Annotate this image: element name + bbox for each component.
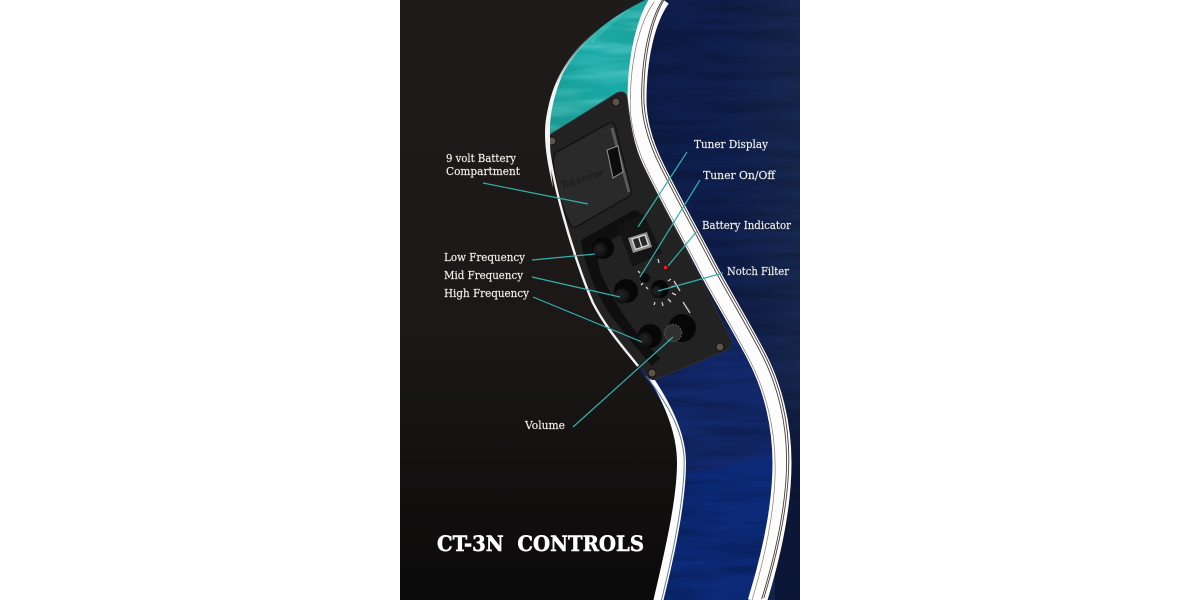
infographic: CT-3N controls: [400, 0, 800, 600]
label: high frequency: High Frequency: [444, 287, 530, 300]
label: 9 volt battery compartment: [446, 152, 521, 178]
preamp recess: [581, 210, 660, 366]
battery LED: [662, 264, 668, 270]
plate screws: [548, 98, 724, 377]
label: notch filter: Notch Filter: [727, 265, 790, 278]
battery latch: [607, 146, 623, 178]
title: CT-3N CONTROLS: [437, 531, 644, 556]
low frequency knob: [592, 237, 614, 259]
label: low frequency: Low Frequency: [444, 251, 526, 264]
maker logo on cover: Takamine: [560, 168, 605, 192]
brighter blue waist section: [640, 320, 772, 600]
waist binding: [632, 352, 686, 600]
outer side edge: [545, 0, 645, 366]
background panel: [400, 0, 800, 600]
label: 9 volt battery compartment: 9 volt Battery: [446, 152, 517, 165]
label: volume: Volume: [524, 419, 565, 432]
label: battery indicator: Battery Indicator: [702, 219, 792, 232]
leader lines: [483, 152, 723, 427]
teal side: [550, 0, 648, 134]
label: tuner on/off: Tuner On/Off: [703, 169, 776, 182]
control plate: [548, 92, 732, 380]
notch filter knob with scale: [638, 259, 690, 313]
upper binding: [630, 0, 789, 600]
label: tuner display: Tuner Display: [694, 138, 769, 151]
label: mid frequency: Mid Frequency: [444, 269, 524, 282]
high frequency knob: [638, 324, 662, 348]
tuner display: [617, 213, 662, 267]
battery compartment cover: [553, 122, 631, 227]
guitar body: [540, 0, 800, 600]
label: 9 volt battery compartment: Compartment: [446, 165, 521, 178]
cover rim highlight: [612, 128, 629, 192]
volume knob: [664, 314, 696, 342]
tuner switch: [640, 273, 650, 283]
top: dark blue flame maple: [574, 0, 800, 600]
mid frequency knob: [614, 279, 638, 304]
